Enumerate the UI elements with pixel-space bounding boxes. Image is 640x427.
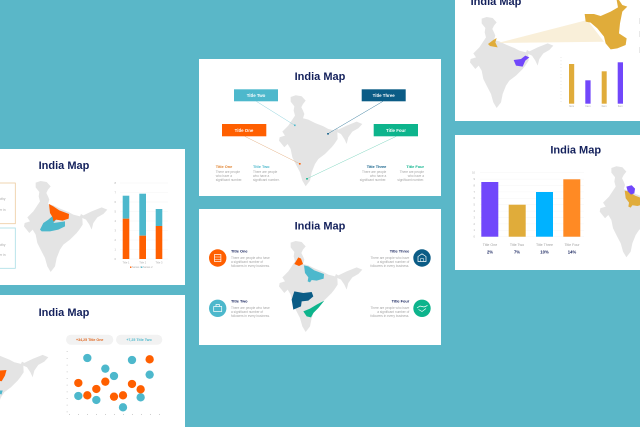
text block: Title One: a significant number of [231,260,263,264]
panel: bar chart slide [455,135,640,270]
text block: Title Two: There are people who have [231,306,270,310]
stacked bar chart: 0 [115,257,117,261]
text block: Title Three: followers in every business. [370,264,409,268]
bar chart: 1 [474,228,476,232]
panel: stacked bar slide [0,149,185,285]
bar chart: 4 [474,209,476,213]
text block: Title One: Title One [216,164,233,169]
connector lines [245,101,396,179]
map of India [470,17,553,108]
chart legend [130,265,153,269]
callout beam [498,20,604,43]
text block: Title Two [231,299,270,318]
bar chart: 9 [474,177,476,181]
text block: Title Four: followers in every business. [370,314,409,318]
text block: Title Three: Title Three [390,249,410,254]
bar labels: Title Two [510,243,524,247]
map of India [279,241,362,332]
map of India [24,181,107,272]
title: India Map [39,307,90,319]
stacked bar chart: 5 [115,210,117,214]
stacked bar chart: 7 [115,190,117,194]
highlighted states [625,185,640,208]
icon: orange circle [209,249,226,267]
label box: Title One [222,124,266,136]
bar chart: 2 [474,222,476,226]
bar chart: 6 [474,196,476,200]
label box: Title Three [362,89,406,101]
stacked bar chart: 6 [115,200,117,204]
text block: Title Four: There are people [400,170,424,174]
side box: orange [0,183,15,224]
stacked bar chart: 3 [115,228,117,232]
text block: Title One: followers in every business. [231,264,270,268]
scatter chart [67,351,160,415]
text block: Title One [216,164,243,182]
text block: Title One: There are people who have [231,256,270,260]
small states [488,38,529,67]
text block: Title Four: significant number. [397,178,424,182]
stacked bar chart [115,181,168,269]
icon: navy circle [413,249,431,267]
text block: Title Three: who have a [370,174,387,178]
bar chart: 10 [472,171,476,175]
text block: Title One [231,249,270,268]
panel: scatter slide [0,295,185,427]
bar chart: Item [602,104,607,108]
text block: Title Three: significant number. [360,178,387,182]
stacked bar chart: Title 2 [139,260,147,264]
text block: Title Three: There are people who have [370,256,410,260]
side box: teal [0,228,15,268]
stacked bar chart: 4 [115,219,117,223]
text block: Title Two: followers in every business. [231,314,270,318]
text block: Title One: There are people [216,170,240,174]
text block: Title Four: who have a [408,174,424,178]
cropped side text [639,18,640,53]
highlighted states [292,257,324,317]
text block: Title One: Title One [231,249,248,254]
bar chart: Item [569,104,574,108]
enlarged state [585,0,627,49]
bar chart: 5 [474,203,476,207]
stacked bar chart: Title 1 [123,260,130,264]
map of India [0,355,48,400]
label box: Title Four: Title Four [386,128,406,133]
map of India [600,166,640,257]
text block: Title Two: There are people [253,170,278,174]
text block: Title One: who have a [216,174,232,178]
bar labels: Title One [483,243,497,247]
label box: Title One: Title One [235,128,254,133]
chart legend: Series 2 [143,265,153,269]
stacked bar chart: 1 [115,248,117,252]
label box: Title Two [234,89,278,101]
bar labels: 2% [487,250,493,255]
stacked bar chart: 2 [115,238,117,242]
bar labels: Title Four [564,243,580,247]
bar labels: 10% [540,250,549,255]
stacked bar chart: 8 [115,181,117,185]
text block: Title Four: Title Four [406,164,424,169]
panel: highlighted states slide [199,209,441,345]
bar labels: 7% [514,250,520,255]
text block: Title Two: Title Two [231,299,248,304]
bar chart: Item [618,104,623,108]
text block: Title Three: a significant number of [377,260,409,264]
pill: Title One: +34,25 Title One [76,338,103,342]
title: India Map [39,160,90,172]
text block: Title One: significant number. [216,178,243,182]
label box: Title Four [374,124,418,136]
panel: callout map slide [199,59,441,196]
bar chart: 0 [474,235,476,239]
text block: Title Four: a significant number of [377,310,409,314]
text block: Title Two: who have a [253,174,270,178]
map of India [279,95,362,186]
text block: Title Two: significant number. [253,178,280,182]
icon: green circle [413,300,431,317]
chart legend: Series 1 [132,265,142,269]
label box: Title Three: Title Three [373,93,395,98]
bar labels: Title Three [536,243,553,247]
title: India Map [550,144,601,156]
pill: Title Two: +7,25 Title Two [126,338,152,342]
bar chart: 7 [474,190,476,194]
bar chart: 8 [474,183,476,187]
text block: Title Two [253,164,280,182]
panel: zoomed state slide [455,0,640,121]
bar labels [482,244,580,254]
bar chart [472,171,584,239]
title: India Map [295,71,346,83]
pill: Title Two [116,335,162,345]
label box: Title Two: Title Two [247,93,266,98]
highlighted states [40,204,69,231]
text block: Title Four [397,164,424,182]
text block: Title Two: a significant number of [231,310,263,314]
pill: Title One [66,335,113,345]
map markers [294,124,329,180]
text block: Title Three [360,164,387,182]
title: India Map [295,220,346,232]
bar labels: 14% [568,250,576,255]
text block: Title Three [370,249,410,268]
bar chart [561,57,623,108]
text block: Title Four: Title Four [392,299,410,304]
stacked bar chart: Title 3 [156,260,163,264]
text block: Title Four [370,299,410,318]
text block: Title Three: There are people [362,170,387,174]
bar chart: Item [585,104,591,108]
icon: teal circle [209,300,226,317]
bar chart: 3 [474,215,476,219]
text block: Title Three: Title Three [367,164,387,169]
text block: Title Four: There are people who have [370,306,410,310]
text block: Title Two: Title Two [253,164,270,169]
